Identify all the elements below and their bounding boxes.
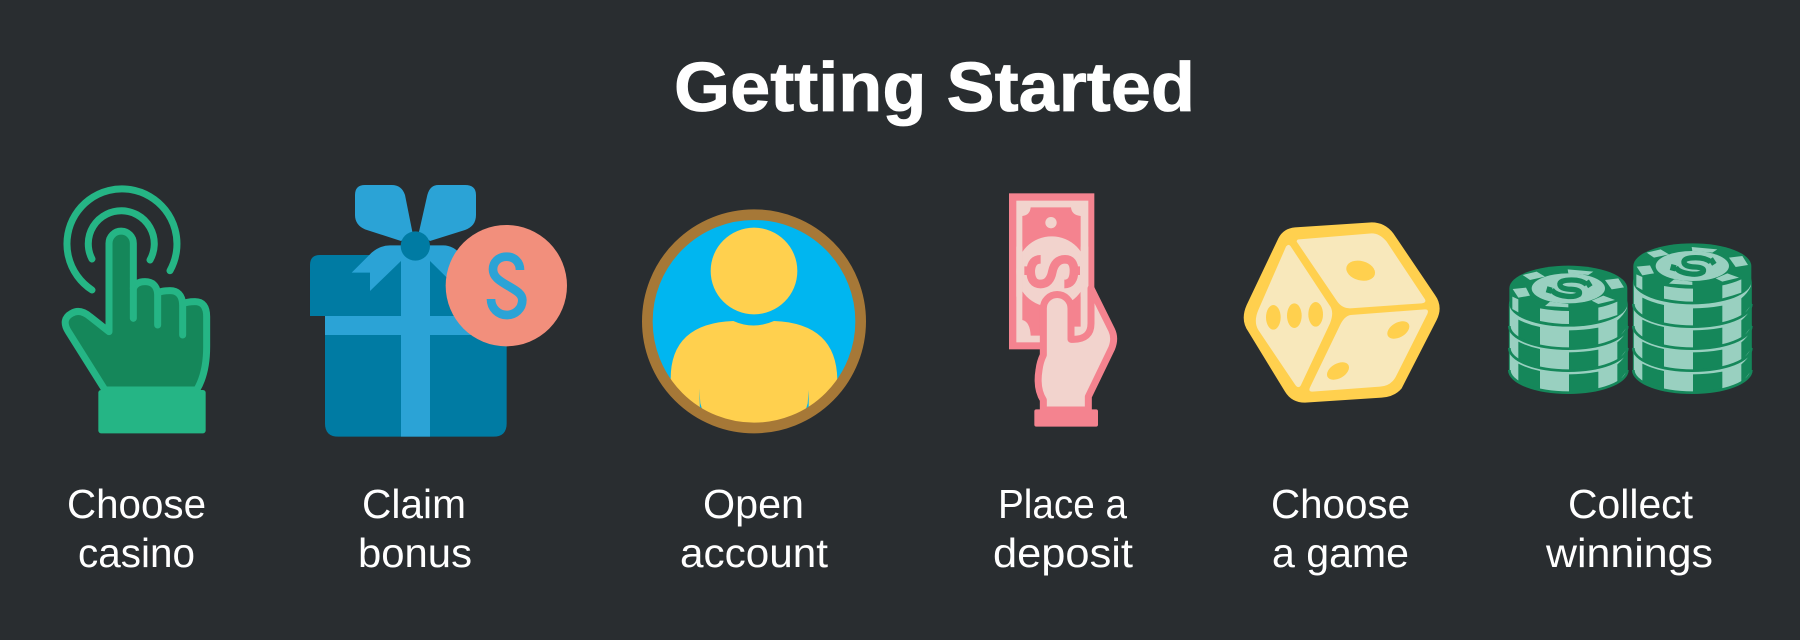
label: place a deposit <box>993 481 1134 576</box>
label: claim bonus: bonus <box>358 530 472 576</box>
label: collect winnings: Collect <box>1568 481 1694 527</box>
box body <box>325 316 507 437</box>
label: choose a game: Choose <box>1271 481 1410 527</box>
banknote <box>1009 193 1094 349</box>
head <box>711 228 797 314</box>
title: Getting Started <box>674 48 1195 126</box>
label: open account: account <box>680 530 829 576</box>
label: collect winnings: winnings <box>1545 530 1713 576</box>
left stack <box>1509 266 1627 393</box>
coin symbol <box>491 257 522 315</box>
icon: user avatar <box>647 215 861 443</box>
label: claim bonus: Claim <box>362 481 466 527</box>
label: collect winnings <box>1545 481 1713 576</box>
label: choose a game <box>1271 481 1410 576</box>
icon: dice <box>1244 222 1440 403</box>
ribbon <box>325 316 503 437</box>
touch arcs <box>67 189 177 290</box>
label: place a deposit: Place a <box>998 481 1127 527</box>
icon: casino chips <box>1509 243 1751 393</box>
avatar background <box>647 215 861 428</box>
left face <box>1256 245 1332 387</box>
finger lines <box>133 288 183 335</box>
note centre <box>1022 207 1081 336</box>
label: place a deposit: deposit <box>993 530 1134 576</box>
label: open account <box>680 481 829 576</box>
icon: pointing hand <box>65 189 207 433</box>
pips <box>1266 258 1412 383</box>
hand outline <box>65 231 207 390</box>
label: choose casino: casino <box>78 530 195 576</box>
cuff <box>1034 409 1098 427</box>
right face <box>1309 309 1428 392</box>
label: open account: Open <box>703 481 804 527</box>
cuff <box>98 390 206 433</box>
right stack <box>1633 243 1751 393</box>
knot <box>401 231 430 261</box>
dollar symbol <box>1024 259 1080 284</box>
ring <box>647 215 861 428</box>
hand <box>1038 288 1114 410</box>
dice outline <box>1244 222 1440 403</box>
label: claim bonus <box>358 481 472 576</box>
lid <box>310 255 490 316</box>
label: choose casino: Choose <box>67 481 206 527</box>
coin <box>446 225 567 346</box>
bow <box>355 185 476 241</box>
label: choose a game: a game <box>1272 530 1409 576</box>
label: choose casino <box>67 481 206 576</box>
top face <box>1297 233 1425 308</box>
ribbon tails <box>352 245 462 291</box>
body <box>670 321 838 423</box>
icon: gift box <box>310 185 567 437</box>
icon: hand with banknote <box>1009 193 1114 427</box>
